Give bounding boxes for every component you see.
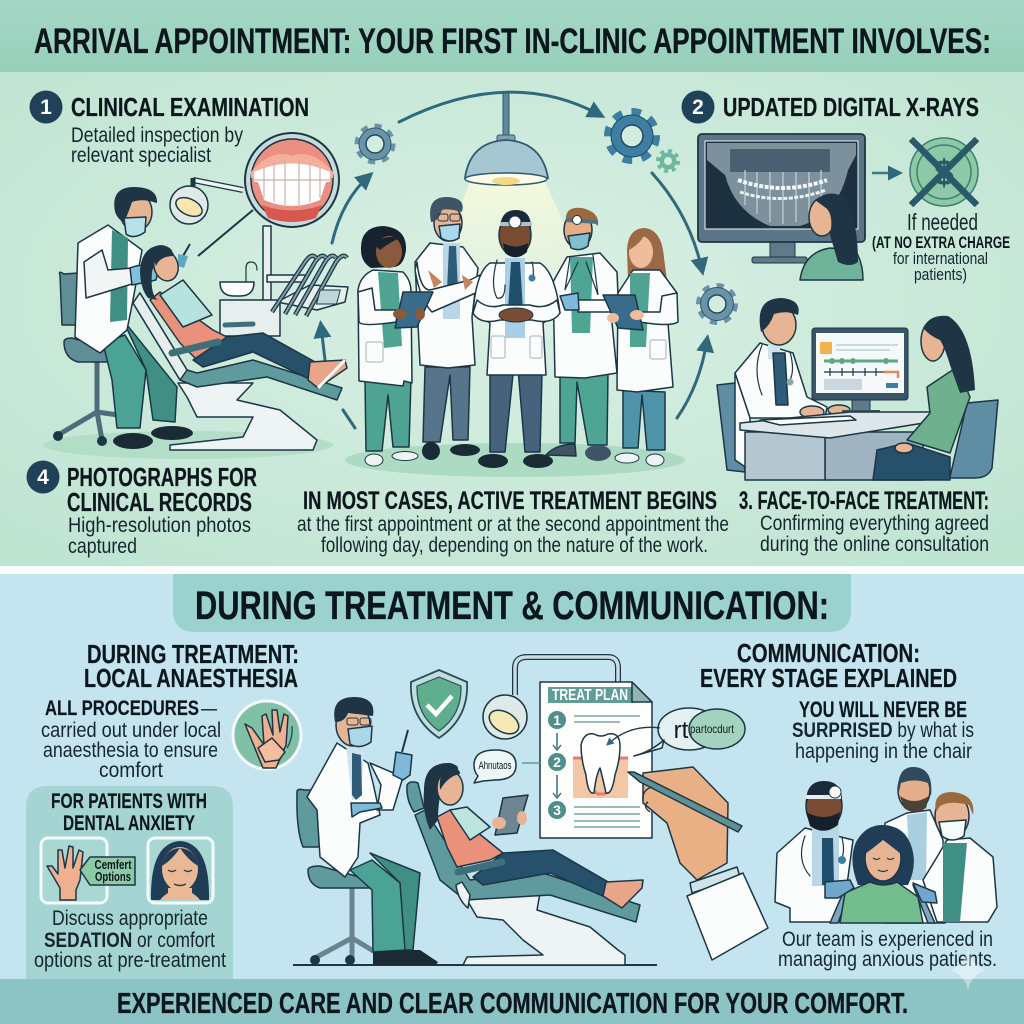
icon: calm patient face [148, 838, 213, 903]
panel: patients with dental anxiety: FOR PATIENTS WITH [51, 790, 207, 813]
step 4: photographs for clinical records: 4 [37, 466, 49, 489]
illustration: dental unit, lamp and instruments [170, 178, 348, 336]
step 4: photographs for clinical records [26, 460, 257, 558]
icon: hand numbing [233, 701, 301, 769]
illustration: patient in dental chair with tablet [407, 763, 643, 965]
panel: patients with dental anxiety [26, 786, 233, 980]
floor shadows [43, 431, 685, 477]
callout: active treatment timing: following day, depending on the nature of the work. [321, 534, 708, 557]
speech bubble: procedure term: rt [674, 717, 689, 744]
text block: during treatment local anaesthesia: ALL PROCEDURES [45, 697, 199, 720]
speech bubble: patient question [474, 750, 540, 783]
step 1: clinical examination [30, 90, 309, 167]
step 2: updated digital x-rays: 2 [692, 96, 704, 119]
background: top panel [0, 72, 1024, 566]
document: treat plan: TREAT PLAN [552, 687, 628, 704]
step 4: photographs for clinical records: High-resolution photos [68, 514, 251, 537]
step 2: updated digital x-rays: patients) [914, 265, 967, 284]
text block: during treatment local anaesthesia: comfort [99, 759, 163, 782]
illustration: team of five clinicians [358, 197, 678, 468]
panel: patients with dental anxiety: SEDATION or comfort [44, 929, 215, 952]
clinician 5: woman with clipboard [603, 228, 678, 466]
icon: magnified mouth with teeth [198, 133, 339, 256]
step 3: face-to-face treatment [739, 487, 989, 556]
clinician 1: woman with clipboard [358, 226, 433, 466]
overhead lamp [465, 93, 548, 185]
text block: communication [700, 638, 974, 763]
step 1: clinical examination: CLINICAL EXAMINATION [71, 92, 309, 122]
document: treat plan: 2 [553, 754, 561, 770]
text block: during treatment local anaesthesia: LOCAL ANAESTHESIA [84, 663, 298, 693]
icon: no extra charge crossed coin [910, 138, 978, 206]
panel: patients with dental anxiety: DENTAL ANXIETY [63, 812, 195, 835]
section heading: during treatment and communication: DURING TREATMENT & COMMUNICATION: [195, 584, 829, 628]
text block: during treatment local anaesthesia: carried out under local [41, 719, 221, 742]
illustration: team reassuring patient [775, 767, 997, 923]
desk [825, 432, 923, 480]
text block: communication: happening in the chair [795, 740, 972, 763]
clinician 4: man with head mirror [546, 208, 618, 461]
chair right [900, 400, 998, 478]
step 1: clinical examination: Detailed inspection by [71, 124, 243, 147]
chair left [717, 383, 745, 472]
illustration: dentist seated on stool [293, 697, 657, 965]
icon: gear right [699, 286, 735, 322]
illustration: dentist on stool [53, 187, 193, 449]
step 1: clinical examination: relevant specialist [71, 144, 211, 167]
document: treat plan: 3 [553, 802, 561, 818]
icon: gear small left [358, 126, 392, 162]
illustration: x-ray monitor with patient [698, 134, 898, 280]
doctor [735, 343, 827, 418]
illustration: patient in dental chair [133, 245, 347, 450]
clinician 3: lead doctor with head mirror [473, 210, 560, 468]
clinician 2: man with glasses [415, 197, 480, 460]
speech bubble: patient question: Ahnutaos [478, 760, 512, 772]
footer banner [0, 979, 1024, 1024]
icon: no extra charge crossed coin: $ [934, 152, 954, 193]
speech bubble: procedure term: partocdurt [690, 722, 735, 736]
process arrows [321, 92, 707, 428]
text block: during treatment local anaesthesia [41, 639, 299, 782]
icon: hand and comfort options tag [41, 838, 135, 903]
text block: communication: COMMUNICATION: [737, 638, 920, 668]
speech bubble: procedure term [608, 708, 745, 756]
background: bottom panel [0, 574, 1024, 980]
caption: anxious patients [778, 928, 997, 971]
step 2: updated digital x-rays: If needed [907, 209, 978, 235]
callout: active treatment timing [297, 487, 729, 557]
icon: hand and comfort options tag: Cemfert [94, 857, 132, 872]
callout: active treatment timing: IN MOST CASES, ACTIVE TREATMENT BEGINS [303, 487, 717, 515]
text block: communication: SURPRISED by what is [792, 719, 974, 742]
step 4: photographs for clinical records: captured [68, 535, 137, 558]
text block: communication: YOU WILL NEVER BE [799, 697, 967, 722]
panel: patients with dental anxiety: options at pre-treatment [34, 949, 226, 972]
text block: during treatment local anaesthesia: DURING TREATMENT: [87, 639, 299, 669]
icon: gear large top right [608, 112, 656, 160]
illustration: dental lamp on arm [483, 657, 618, 739]
monitor [852, 400, 870, 411]
document: treat plan: 1 [553, 712, 561, 728]
step 4: photographs for clinical records: CLINICAL RECORDS [67, 487, 252, 517]
icon: hand and comfort options tag: Options [95, 869, 131, 884]
panel: patients with dental anxiety: Discuss appropriate [52, 907, 208, 930]
icon: safety shield [411, 670, 467, 738]
sparkle mark [950, 947, 986, 992]
illustration: hand holding pen [628, 767, 768, 960]
patient [873, 443, 950, 480]
text block: during treatment local anaesthesia: anaesthesia to ensure [43, 739, 218, 762]
step 2: updated digital x-rays [682, 90, 1010, 284]
title banner [0, 0, 1024, 72]
text block: during treatment local anaesthesia: — [201, 697, 217, 720]
step 1: clinical examination: 1 [40, 96, 52, 119]
illustration: face-to-face consultation [717, 298, 998, 480]
document: treat plan [540, 682, 652, 838]
step 2: updated digital x-rays: for international [893, 249, 988, 268]
icon: gear tiny green [658, 151, 678, 171]
section heading: during treatment and communication [173, 574, 851, 632]
lamp light cone [405, 182, 620, 345]
step 4: photographs for clinical records: PHOTOGRAPHS FOR [67, 462, 257, 492]
callout: active treatment timing: at the first appointment or at the second appointment the [297, 513, 729, 536]
